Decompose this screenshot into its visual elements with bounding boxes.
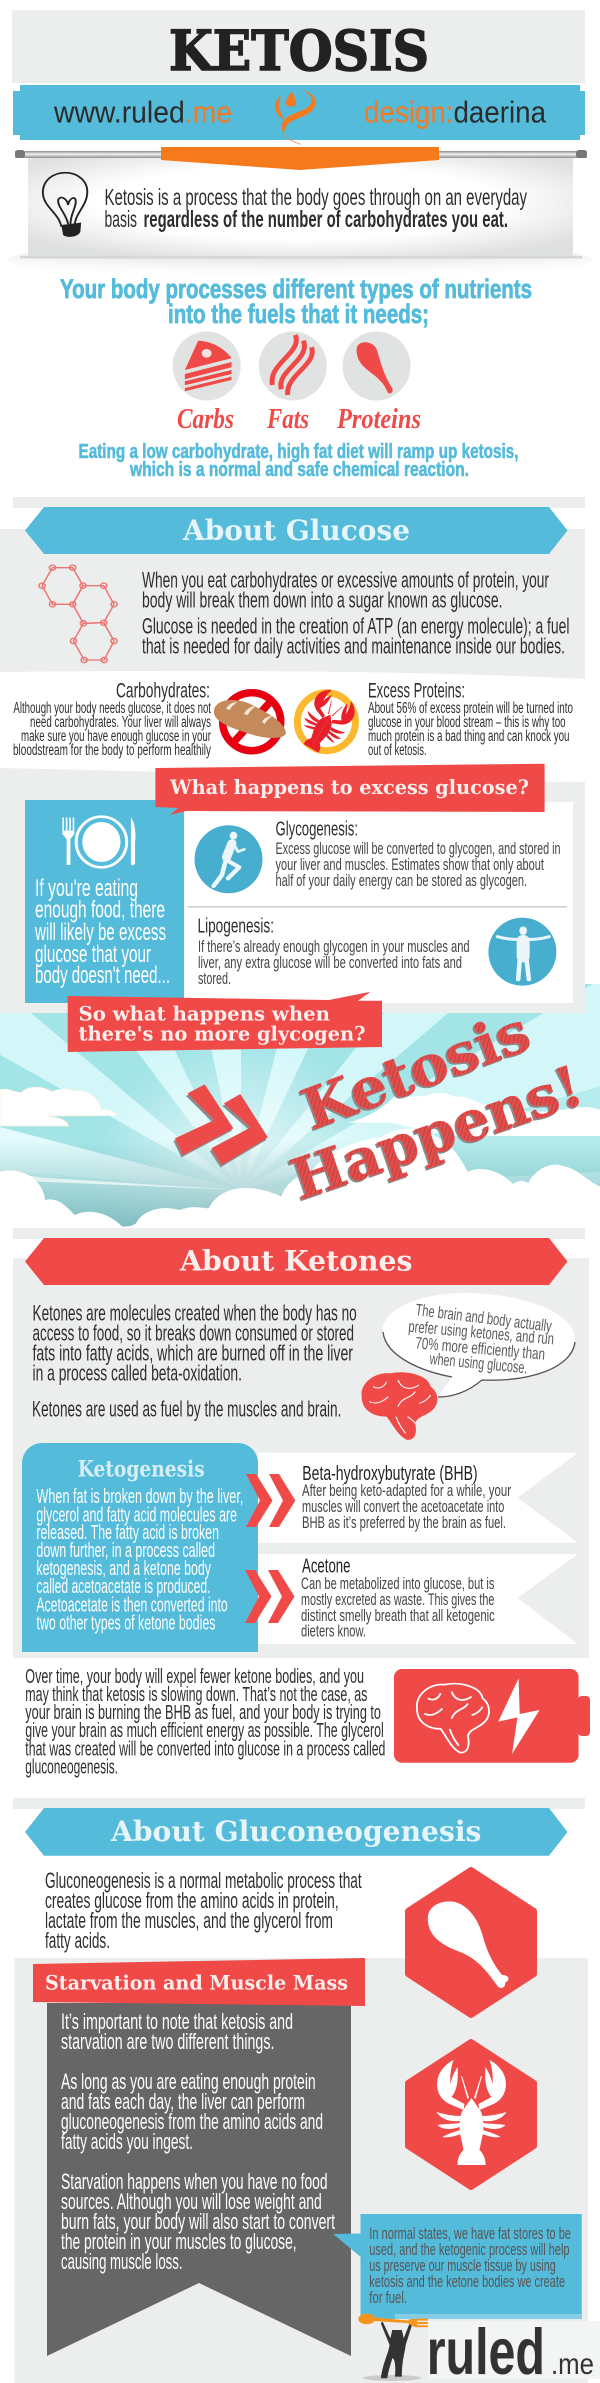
icon: no protein <box>292 685 360 759</box>
intro text <box>104 184 527 232</box>
card: acetone: Acetone <box>302 1556 350 1578</box>
icon: molecule <box>39 565 117 663</box>
title: KETOSIS <box>169 18 429 83</box>
ribbon: about gluconeogenesis <box>13 1798 585 1856</box>
callout: normal states <box>333 2214 582 2319</box>
card: acetone <box>245 1554 578 1644</box>
text block: gluconeogenesis: creates glucose from the amino acids in protein, <box>45 1888 339 1913</box>
panel: starvation ribbon: It’s important to note that ketosis and <box>61 2009 293 2034</box>
card: beta-hydroxybutyrate: Beta-hydroxybutyrate (BHB) <box>302 1463 478 1485</box>
card: beta-hydroxybutyrate: BHB as it’s preferred by the brain as fuel. <box>302 1514 506 1532</box>
panel: ketogenesis: Ketogenesis <box>78 1457 205 1483</box>
excess food text: body doesn't need... <box>35 962 170 989</box>
panel: white details box <box>184 802 573 1003</box>
text block: carbohydrates: make sure you have enough glucose in your <box>21 728 211 745</box>
text block: gluconeogenesis: fatty acids. <box>45 1928 110 1953</box>
text block: over time <box>25 1666 385 1778</box>
icon: fats bacon <box>259 332 327 400</box>
callout: normal states: for fuel. <box>369 2289 407 2307</box>
text block: gluconeogenesis: Gluconeogenesis is a normal metabolic process that <box>45 1868 362 1893</box>
card: acetone: distinct smelly breath that all ketogenic <box>301 1607 495 1625</box>
card: acetone: mostly excreted as waste. This gives the <box>301 1591 494 1609</box>
icon: red brain <box>361 1372 437 1440</box>
text block: over time: that was created will be converted into glucose in a process called <box>25 1738 385 1760</box>
panel: starvation ribbon: the protein in your muscles to glucose, <box>61 2229 297 2254</box>
panel: starvation ribbon: gluconeogenesis from the amino acids and <box>61 2109 323 2134</box>
designer credit: design:daerina <box>364 94 547 130</box>
panel: ketogenesis <box>22 1443 258 1652</box>
banner: website and designer <box>13 85 585 145</box>
callout: no more glycogen: there's no more glycogen? <box>78 1022 366 1046</box>
panel: starvation ribbon <box>47 2003 351 2356</box>
heading: starvation and muscle mass: Starvation and Muscle Mass <box>45 1970 348 1994</box>
panel: ketogenesis: called acetoacetate is produced. <box>36 1576 211 1598</box>
panel: about ketones <box>13 1228 589 1658</box>
icon: figure lifting fork <box>358 2314 428 2378</box>
icon: plate and cutlery <box>62 817 135 867</box>
text block: excess proteins: Excess Proteins: <box>368 680 465 703</box>
text block: gluconeogenesis: lactate from the muscles, and the glycerol from <box>45 1908 333 1933</box>
speech bubble: 70% more efficiently than <box>415 1334 546 1364</box>
speech bubble: when using glucose. <box>428 1350 528 1377</box>
text block: lipogenesis: If there’s already enough glycogen in your muscles and <box>198 938 470 956</box>
website url: www.ruled.me <box>53 94 232 130</box>
panel: ketogenesis: released. The fatty acid is broken <box>36 1522 219 1544</box>
heading: starvation and muscle mass <box>33 1958 365 2006</box>
panel: title <box>12 10 585 83</box>
panel: starvation ribbon: causing muscle loss. <box>61 2249 182 2274</box>
text block: over time: gluconeogenesis. <box>25 1756 118 1778</box>
ribbon: about glucose: About Glucose <box>182 514 410 547</box>
text block: carbohydrates: Carbohydrates: <box>116 680 210 703</box>
icon: runner <box>194 825 262 893</box>
ketones text: in a process called beta-oxidation. <box>32 1361 242 1386</box>
ketones text: fats into fatty acids, which are burned off in the liver <box>32 1341 353 1366</box>
intro text: basis <box>104 206 137 232</box>
ketones text: access to food, so it breaks down consumed or stored <box>32 1321 354 1346</box>
heading: nutrients <box>60 274 532 329</box>
text block: glycogenesis: Glycogenesis: <box>276 819 358 841</box>
callout: no more glycogen: So what happens when <box>78 1002 330 1026</box>
icon: no bread <box>214 693 286 751</box>
icon: human body <box>488 918 556 986</box>
illustration: sky background <box>0 984 600 1232</box>
text block: lipogenesis: liver, any extra glucose will be converted into fats and <box>198 954 462 972</box>
icon: carbs cake <box>173 332 241 400</box>
card: beta-hydroxybutyrate: After being keto-adapted for a while, your <box>302 1482 511 1500</box>
panel: ketogenesis: Acetoacetate is then converted into <box>36 1595 228 1617</box>
ketones text <box>32 1301 357 1422</box>
ribbon: about glucose <box>25 507 568 554</box>
nutrient labels: Carbs <box>177 404 234 435</box>
callout: what happens to excess glucose: What happens to excess glucose? <box>169 775 529 799</box>
headline: ketosis happens: Happens! <box>282 1054 590 1215</box>
headline: ketosis happens: Ketosis <box>292 1000 537 1145</box>
card: acetone: dieters know. <box>301 1623 366 1641</box>
panel: starvation ribbon: sources. Although you will lose weight and <box>61 2189 322 2214</box>
text block: lipogenesis: Lipogenesis: <box>198 916 274 938</box>
panel: starvation ribbon: As long as you are eating enough protein <box>61 2069 316 2094</box>
text block: over time: may think that ketosis is slowing down. That’s not the case, as <box>25 1684 367 1706</box>
icon: brain battery <box>394 1669 590 1763</box>
panel: starvation background <box>14 1958 588 2383</box>
card: beta-hydroxybutyrate: muscles will convert the acetoacetate into <box>302 1498 504 1516</box>
headline: ketosis happens: Happens! <box>283 1053 591 1213</box>
text block: carbohydrates: bloodstream for the body to perform healthily <box>13 742 211 759</box>
panel: ketogenesis: glycerol and fatty acid molecules are <box>36 1505 237 1527</box>
text block: carbohydrates <box>13 680 211 759</box>
panel: starvation ribbon: starvation are two different things. <box>61 2029 274 2054</box>
subheading: low carb diet <box>78 441 518 481</box>
text block: glycogenesis <box>276 819 560 890</box>
text block: lipogenesis <box>198 916 470 988</box>
panel: about glucose <box>0 497 585 679</box>
icon: red chevrons <box>246 1474 295 1527</box>
panel: excess glucose <box>0 768 585 1013</box>
ketones text: Ketones are molecules created when the body has no <box>32 1301 357 1326</box>
panel: ketogenesis: ketogenesis, and a ketone body <box>36 1558 211 1580</box>
panel: starvation ribbon: fatty acids you ingest. <box>61 2129 193 2154</box>
panel: starvation ribbon: Starvation happens when you have no food <box>61 2169 328 2194</box>
card: beta-hydroxybutyrate <box>246 1453 578 1543</box>
text block: over time: give your brain as much efficient energy as possible. The glycerol <box>25 1720 384 1742</box>
excess food text: If you're eating <box>35 875 138 902</box>
icon: red chevrons <box>245 1570 294 1623</box>
text block: excess proteins: out of ketosis. <box>368 742 427 759</box>
nutrient labels <box>177 404 421 435</box>
glucose text <box>142 567 570 658</box>
excess food text: enough food, there <box>35 897 165 924</box>
heading: nutrients: into the fuels that it needs; <box>168 299 429 329</box>
logo: ruled.me <box>358 2314 600 2383</box>
headline: ketosis happens: Ketosis <box>294 998 539 1143</box>
excess food text <box>34 875 170 989</box>
icon: orange figure logo <box>275 89 316 145</box>
icon: double chevron arrow <box>173 1084 268 1167</box>
icon: drumstick hexagon <box>408 1870 534 2015</box>
card: acetone: Can be metabolized into glucose, but is <box>301 1575 494 1593</box>
excess food text: glucose that your <box>35 941 151 968</box>
panel: ketogenesis: When fat is broken down by the liver, <box>36 1486 243 1508</box>
panel: blue excess food <box>25 800 184 1003</box>
subheading: low carb diet: which is a normal and safe chemical reaction. <box>129 459 469 481</box>
icon: lobster hexagon <box>408 2042 534 2187</box>
nutrient labels: Fats <box>266 404 309 435</box>
text block: carbohydrates: Although your body needs glucose, it does not <box>13 700 211 717</box>
callout: no more glycogen <box>68 992 382 1052</box>
text block: over time: your brain is burning the BHB as fuel, and your body is trying to <box>25 1702 381 1724</box>
ribbon: about gluconeogenesis: About Gluconeogenesis <box>110 1815 481 1848</box>
icon: proteins drumstick <box>343 332 411 400</box>
ribbon: about ketones <box>25 1238 568 1285</box>
icon: light bulb <box>43 173 87 237</box>
ribbon: about ketones: About Ketones <box>179 1245 412 1278</box>
excess food text: will likely be excess <box>34 919 166 946</box>
panel: starvation ribbon: and fats each day, the liver can perform <box>61 2089 305 2114</box>
text block: over time: Over time, your body will expel fewer ketone bodies, and you <box>25 1666 364 1688</box>
text block: carbohydrates: need carbohydrates. Your liver will always <box>30 714 211 731</box>
speech bubble <box>383 1293 575 1397</box>
panel: starvation ribbon: burn fats, your body will also start to convert <box>61 2209 335 2234</box>
panel: ketogenesis: two other types of ketone bodies <box>36 1613 216 1635</box>
panel: ketogenesis: down further, in a process called <box>36 1540 215 1562</box>
nutrient labels: Proteins <box>336 404 421 435</box>
text block: gluconeogenesis <box>45 1868 362 1953</box>
panel: intro scroll <box>8 147 592 280</box>
text block: excess proteins <box>368 680 573 759</box>
ketones text: Ketones are used as fuel by the muscles and brain. <box>32 1397 341 1422</box>
logo: ruled.me: .me <box>551 2348 594 2381</box>
callout: what happens to excess glucose <box>155 764 545 815</box>
text block: lipogenesis: stored. <box>198 970 231 988</box>
